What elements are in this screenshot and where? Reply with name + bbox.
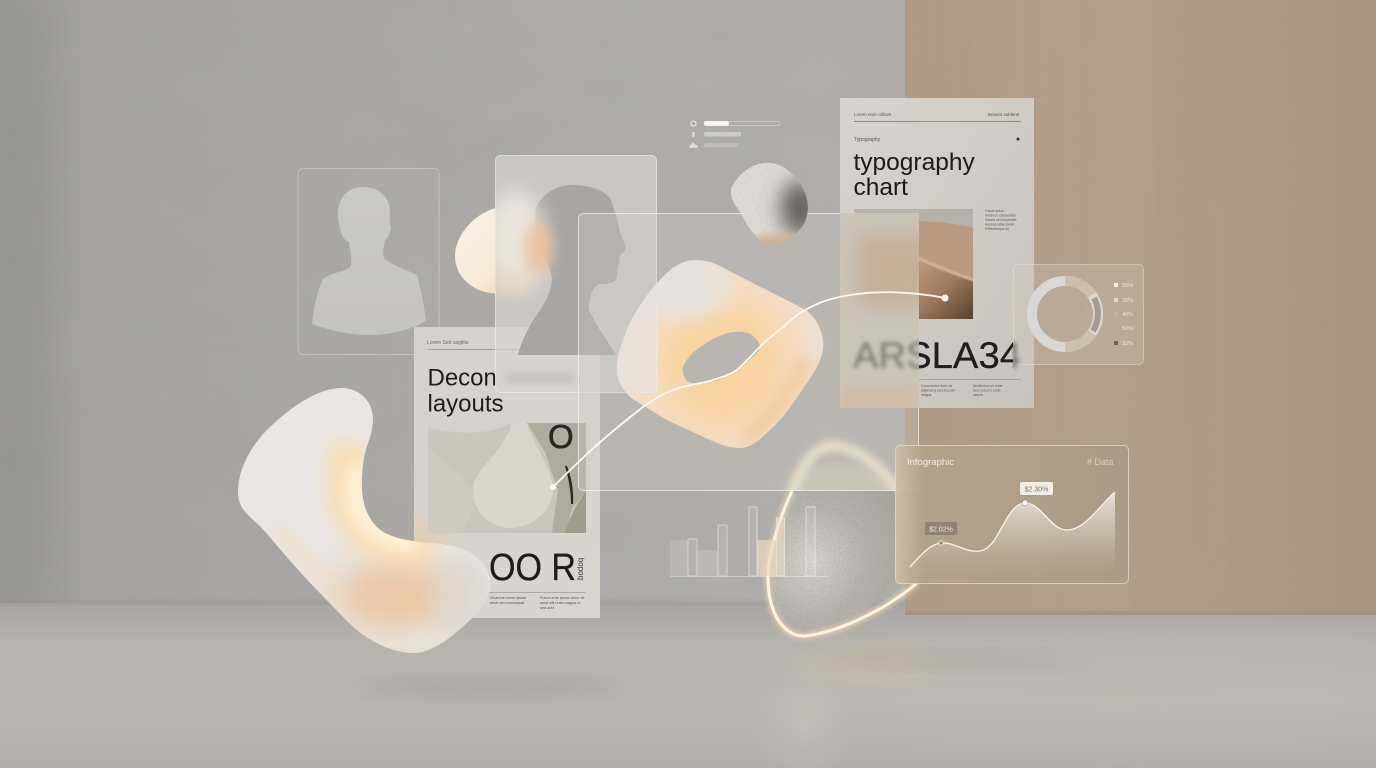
poster caption text: magna <box>921 393 931 397</box>
icon: profile silhouette <box>518 185 626 355</box>
rotated small label: bodoq <box>576 558 585 580</box>
poster caption text: amet elit nulla magna et <box>540 601 581 605</box>
marker and label: high point: $2.30% <box>1025 486 1048 494</box>
chart line <box>910 492 1115 567</box>
heading: typography chart <box>854 149 975 201</box>
donut legend: 50% <box>1122 326 1133 332</box>
glowing ring <box>768 491 917 636</box>
poster: typography chart: Beaunt sublentt <box>988 112 1020 117</box>
poster image: warm skin form <box>854 209 973 319</box>
shape: peach blob behind glass <box>455 208 495 294</box>
poster paragraph: Vivamus consectetur <box>985 214 1017 218</box>
poster caption text: Consectetur dolor sit <box>921 384 952 388</box>
heading: Decon layouts: layouts <box>428 390 504 418</box>
poster caption text: adipiscing sed aliquam <box>921 388 955 392</box>
icon: small person <box>690 142 698 148</box>
card heading: Infographic <box>907 457 954 468</box>
bar chart: glass bars <box>670 507 830 577</box>
poster caption text: aliquet <box>973 393 983 397</box>
icon: person silhouette <box>312 187 426 335</box>
shape: large glowing organic form <box>238 388 495 666</box>
panel: infographic area chart card <box>896 446 1128 584</box>
poster image: drop form <box>428 423 586 533</box>
poster: typography chart: Lorem enim album <box>854 112 892 117</box>
connector line with endpoints <box>550 292 948 490</box>
poster caption text: Vivamus lorem ipsum <box>490 596 526 600</box>
floor shadow: left object <box>350 681 630 695</box>
icon: small dial <box>691 121 696 126</box>
heading: Decon layouts: Decon <box>428 364 497 392</box>
shape: top stone <box>730 162 808 245</box>
card tag: # Data <box>1087 457 1114 467</box>
area chart <box>910 492 1115 572</box>
poster caption text: Sed posuere nulla <box>973 388 1000 392</box>
poster caption text <box>490 596 585 610</box>
donut chart <box>1032 281 1098 347</box>
background: polished floor <box>0 600 1376 768</box>
floor shadow: right object <box>820 654 1080 666</box>
donut legend: 33% <box>1122 341 1133 347</box>
panel: glass portrait card <box>482 156 656 392</box>
shape: grainy stone with glowing ring <box>768 491 917 636</box>
poster: typography chart <box>840 98 1034 408</box>
marker and label: high point <box>1020 482 1053 506</box>
marker and label: low point <box>925 522 957 545</box>
donut legend <box>1114 283 1133 347</box>
heading: typography chart: chart <box>854 174 908 201</box>
background: wood panel <box>905 0 1376 615</box>
connector end dot <box>942 294 948 302</box>
donut legend: 40% <box>1122 312 1133 318</box>
large letters: ARSLA34 <box>853 335 1021 376</box>
poster paragraph: Mauris sed imperdiet <box>985 218 1017 222</box>
heading: Decon layouts <box>428 364 504 418</box>
donut legend: 20% <box>1122 283 1133 289</box>
poster paragraph: Fusce ipsum <box>985 209 1004 213</box>
poster caption text <box>921 384 1002 397</box>
poster caption text: amet sed consequat <box>490 601 525 605</box>
icon: small marker <box>1016 138 1020 140</box>
shape: grainy stone seen through glass <box>784 438 896 491</box>
poster paragraph <box>985 209 1017 231</box>
heading: typography chart: typography <box>854 149 975 176</box>
poster caption text: Fusce ante ipsum dolor sit <box>540 596 585 600</box>
frosted blob seen through card <box>495 186 575 384</box>
panel: large frosted glass card <box>578 213 919 491</box>
panel: glass silhouette card <box>298 168 439 354</box>
connector start dot <box>550 484 556 490</box>
poster: Decon layouts: Lorem Sed sagittis <box>427 340 469 346</box>
panel: donut chart card <box>1013 264 1144 370</box>
shape: glowing torus <box>616 260 824 448</box>
donut legend: 30% <box>1122 298 1133 304</box>
poster image letter: O <box>548 418 574 455</box>
small progress bars with icons <box>690 121 780 148</box>
icon: small bars <box>692 132 695 137</box>
poster: Decon layouts <box>414 327 600 618</box>
frosted letter seen through card: ARSLA34 <box>853 335 1021 376</box>
poster paragraph: Pellentesque sit <box>985 227 1009 231</box>
marker and label: low point: $2.02% <box>929 526 953 534</box>
poster paragraph: Aenean vitae lorem <box>985 222 1014 226</box>
large letters: OO R <box>489 547 576 589</box>
frosted overlap on typography poster: ARSLA34 <box>853 335 1021 376</box>
frosted overlap on typography poster <box>840 213 919 408</box>
poster: typography chart: Typography <box>854 137 881 143</box>
poster caption text: Vestibulum sit amet <box>973 384 1002 388</box>
poster caption text: sed ante <box>540 606 555 610</box>
